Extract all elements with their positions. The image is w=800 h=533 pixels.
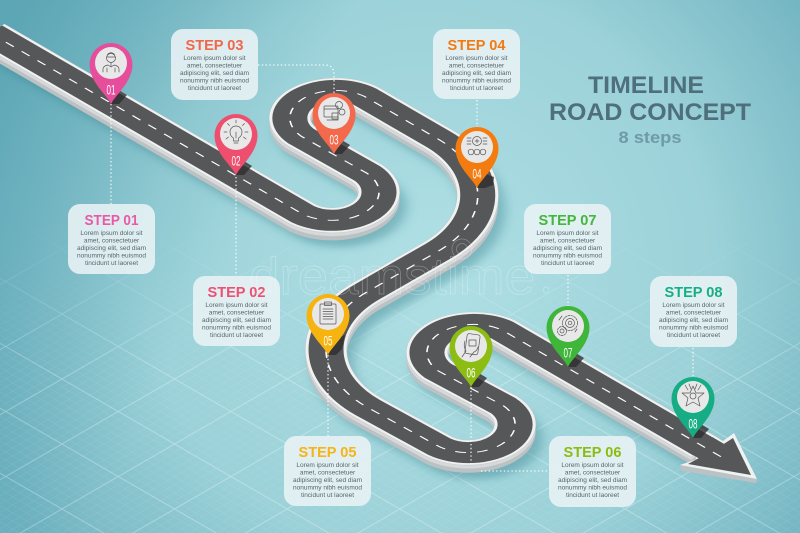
pin 01 (90, 43, 132, 104)
icon: person (103, 53, 119, 72)
step 01 card: amet, consectetuer (84, 238, 140, 244)
step 03 card: Lorem ipsum dolor sit (183, 55, 246, 62)
pin 02 (214, 114, 258, 175)
pin 04: 04 (472, 166, 482, 182)
pin 01: 01 (106, 82, 116, 98)
pin 08 (672, 377, 714, 438)
step 02 card: adipiscing elit, sed diam (202, 317, 271, 324)
icon: card and gears (324, 102, 345, 120)
title: 8 steps (618, 129, 682, 147)
step 05 card: STEP 05 (298, 445, 356, 461)
step 08 card: adipiscing elit, sed diam (659, 317, 728, 324)
step 07 card: nonummy nibh euismod (533, 252, 602, 260)
pin 02: 02 (232, 154, 240, 168)
step 08 card (650, 276, 737, 347)
step 05 card: tincidunt ut laoreet (301, 492, 354, 499)
pin 08: 08 (688, 416, 698, 432)
step 03 card: adipiscing elit, sed diam (180, 70, 249, 77)
step 06 card: Lorem ipsum dolor sit (561, 462, 624, 469)
pin 07: 07 (564, 346, 572, 360)
pin 03 (312, 93, 356, 154)
icon: gears (558, 316, 578, 336)
step 05 card: adipiscing elit, sed diam (293, 477, 362, 484)
title: ROAD CONCEPT (549, 99, 751, 126)
step 02 card: Lorem ipsum dolor sit (205, 302, 268, 309)
step 08 card: nonummy nibh euismod (659, 324, 728, 332)
step 05 card (284, 436, 371, 506)
road (0, 33, 757, 483)
step 07 card: amet, consectetuer (540, 238, 596, 244)
title: TIMELINE (588, 72, 704, 99)
step 01 card: STEP 01 (84, 213, 138, 229)
step 07 card: STEP 07 (538, 213, 596, 229)
icon: phone in hand (462, 333, 480, 357)
step 07 card (524, 204, 611, 274)
icon: list and circles (467, 136, 487, 155)
step 03 card: nonummy nibh euismod (180, 78, 249, 84)
step 02 card: nonummy nibh euismod (202, 324, 271, 332)
step 04 card (433, 29, 520, 99)
step 06 card (549, 436, 636, 507)
step 03 card: STEP 03 (186, 38, 244, 54)
step 04 card: tincidunt ut laoreet (450, 85, 503, 92)
step 02 card: STEP 02 (208, 285, 266, 301)
step 07 card: tincidunt ut laoreet (541, 260, 594, 267)
step 06 card: nonummy nibh euismod (558, 484, 627, 492)
step 01 card (68, 204, 155, 274)
step 02 card: amet, consectetuer (209, 310, 265, 316)
pin 05: 05 (324, 334, 332, 348)
pin 03: 03 (330, 132, 338, 148)
step 08 card: STEP 08 (664, 285, 722, 301)
step 05 card: amet, consectetuer (300, 470, 356, 476)
pin 05 (306, 294, 350, 355)
pin 06: 06 (466, 366, 476, 380)
step 04 card: adipiscing elit, sed diam (442, 70, 511, 77)
icon: light bulb (224, 120, 248, 143)
step 07 card: Lorem ipsum dolor sit (536, 230, 599, 237)
step 06 card: adipiscing elit, sed diam (558, 477, 627, 484)
step 04 card: STEP 04 (448, 38, 506, 54)
pin 06 (450, 326, 492, 387)
step 06 card: amet, consectetuer (565, 470, 621, 476)
icon: clipboard (320, 302, 336, 324)
pin 04 (456, 127, 498, 188)
icon: star (682, 384, 704, 406)
step 01 card: tincidunt ut laoreet (85, 260, 138, 267)
step 01 card: Lorem ipsum dolor sit (80, 230, 143, 237)
step 03 card: tincidunt ut laoreet (188, 85, 241, 92)
step 03 card (171, 29, 258, 100)
step 04 card: Lorem ipsum dolor sit (445, 55, 508, 62)
title (549, 72, 751, 147)
step 08 card: amet, consectetuer (666, 310, 722, 316)
step 03 card: amet, consectetuer (187, 62, 243, 70)
step 06 card: tincidunt ut laoreet (566, 492, 619, 499)
step 05 card: nonummy nibh euismod (293, 484, 362, 492)
pin 07 (546, 306, 590, 367)
step 01 card: nonummy nibh euismod (77, 252, 146, 260)
dotted connectors (111, 65, 693, 471)
step 07 card: adipiscing elit, sed diam (533, 245, 602, 252)
arrow head (680, 425, 757, 483)
step 05 card: Lorem ipsum dolor sit (296, 462, 359, 469)
step 06 card: STEP 06 (564, 445, 622, 461)
step 02 card: tincidunt ut laoreet (210, 332, 263, 339)
step 02 card (193, 276, 280, 346)
step 04 card: amet, consectetuer (449, 62, 505, 70)
step 08 card: Lorem ipsum dolor sit (662, 302, 725, 309)
step 08 card: tincidunt ut laoreet (667, 332, 720, 339)
step 04 card: nonummy nibh euismod (442, 78, 511, 84)
step 01 card: adipiscing elit, sed diam (77, 245, 146, 252)
watermark: dreamstime (249, 248, 535, 306)
